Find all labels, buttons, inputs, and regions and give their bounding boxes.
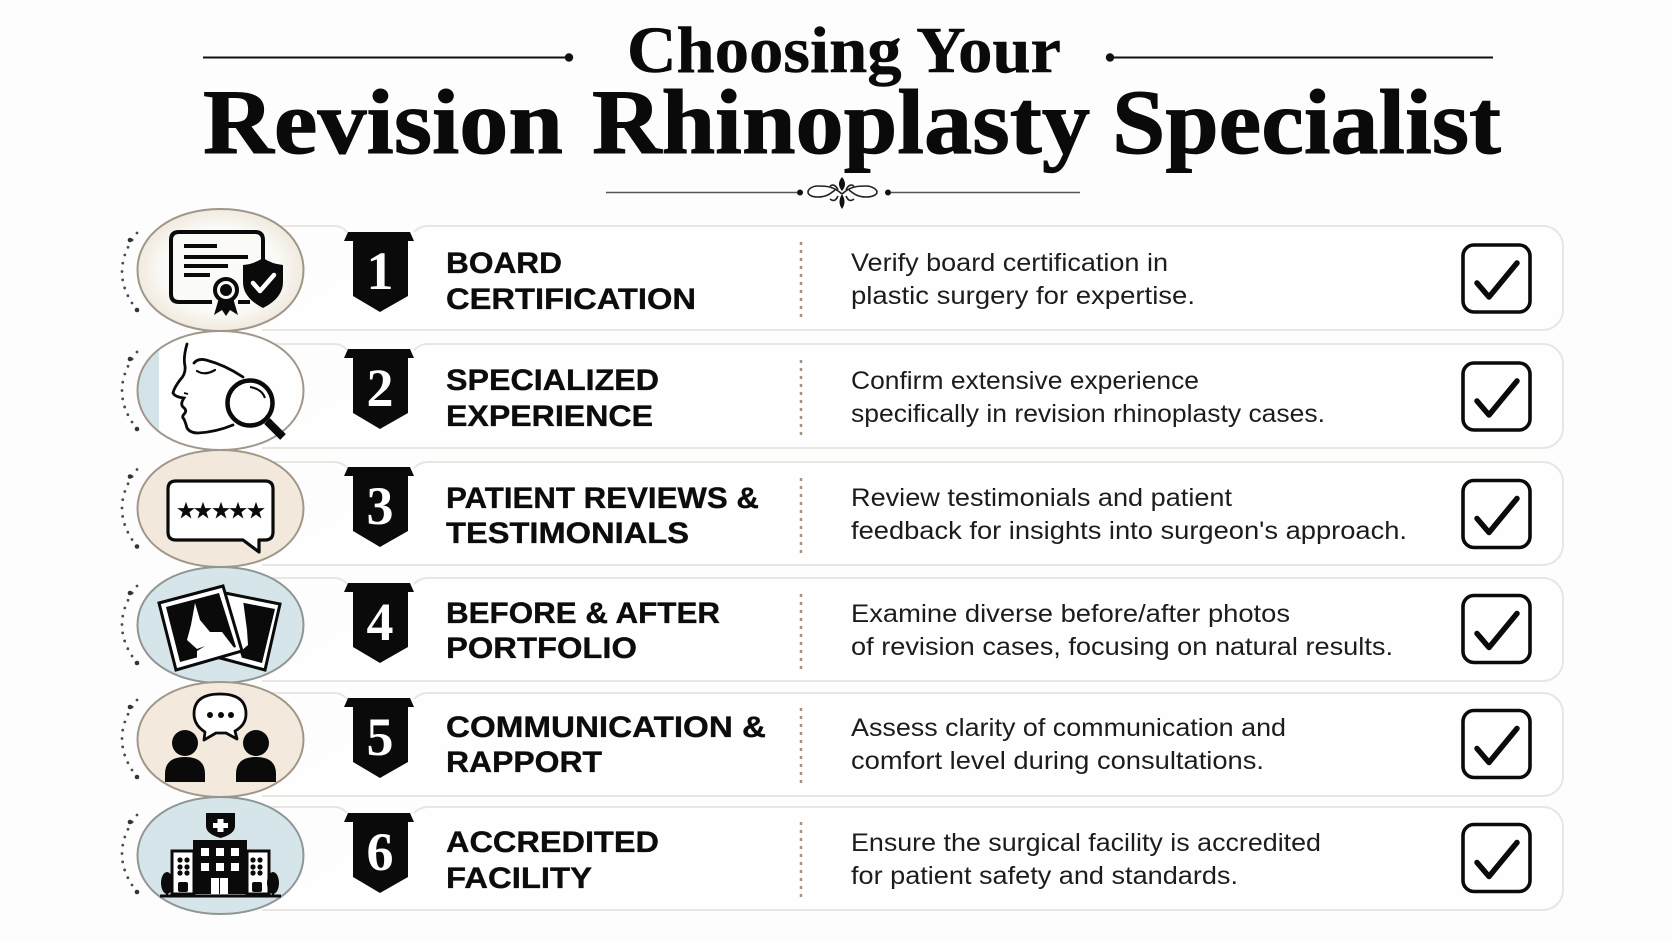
row 1 description xyxy=(851,249,1195,310)
ornamental flourish divider xyxy=(606,177,1080,209)
row 1 number badge xyxy=(344,232,414,312)
row 5 number badge xyxy=(344,698,414,778)
row 1 card xyxy=(262,226,1563,330)
row 5 checkbox xyxy=(1463,710,1530,778)
row 1 heading: CERTIFICATION xyxy=(446,283,696,316)
row 3 description: Review testimonials and patient xyxy=(851,484,1232,512)
row 2 dotted arc xyxy=(122,352,139,431)
row 3 description xyxy=(851,484,1407,545)
row 2 description: Confirm extensive experience xyxy=(851,367,1199,395)
row 3 description: feedback for insights into surgeon's approach. xyxy=(851,517,1407,545)
row 2 description xyxy=(851,367,1325,428)
row 1 checkbox xyxy=(1463,245,1530,312)
row 6 number badge: 6 xyxy=(366,822,394,882)
row 6 icon: hospital building xyxy=(138,797,304,914)
row 1 description: Verify board certification in xyxy=(851,249,1168,277)
row 6 heading: ACCREDITED xyxy=(446,826,659,859)
row 5 dotted arc xyxy=(122,700,139,779)
row 2 heading xyxy=(446,364,659,433)
row 6 description: for patient safety and standards. xyxy=(851,862,1238,890)
row 4 heading xyxy=(446,597,720,665)
title xyxy=(203,14,1501,173)
row 4 description xyxy=(851,600,1393,661)
row 2 description: specifically in revision rhinoplasty cases. xyxy=(851,400,1325,428)
row 3 heading: PATIENT REVIEWS & xyxy=(446,482,759,515)
row 3 heading: TESTIMONIALS xyxy=(446,517,689,550)
title line two: Revision Rhinoplasty Specialist: Revision xyxy=(203,71,563,173)
row 5 heading xyxy=(446,711,766,779)
row 3 heading xyxy=(446,482,759,550)
row 5 description xyxy=(851,714,1286,775)
title line one: Choosing Your: Choosing Your xyxy=(627,14,1061,87)
row 1 number badge: 1 xyxy=(366,241,394,301)
row 6 number badge xyxy=(344,813,414,893)
row 1 dotted arc xyxy=(122,233,139,312)
row 3 number badge: 3 xyxy=(366,476,394,536)
row 5 description: comfort level during consultations. xyxy=(851,747,1264,775)
row 6 dotted arc xyxy=(122,815,139,894)
title right rule with dot xyxy=(1106,53,1493,62)
row 4 description: of revision cases, focusing on natural results. xyxy=(851,633,1393,661)
row 6 checkbox xyxy=(1463,824,1530,892)
row 4 dotted arc xyxy=(122,586,139,665)
row 6 heading xyxy=(446,826,659,895)
row 2 icon: face profile with magnifier xyxy=(136,331,304,450)
row 2 number badge xyxy=(344,349,414,429)
row 6 card xyxy=(262,807,1563,910)
row 5 heading: COMMUNICATION & xyxy=(446,711,766,744)
row 2: specialized experience xyxy=(122,325,1563,455)
title left rule with dot xyxy=(203,53,573,62)
row 3 card xyxy=(262,462,1563,565)
row 1 description: plastic surgery for expertise. xyxy=(851,282,1195,310)
row 6 description: Ensure the surgical facility is accredited xyxy=(851,829,1321,857)
row 5 card xyxy=(262,693,1563,796)
row 5: communication and rapport xyxy=(122,682,1563,797)
row 4 heading: PORTFOLIO xyxy=(446,632,637,665)
row 3 icon: review speech bubble with stars xyxy=(138,450,304,567)
row 2 heading: EXPERIENCE xyxy=(446,400,653,433)
row 2 checkbox xyxy=(1463,363,1530,430)
row 3 checkbox xyxy=(1463,480,1530,548)
row 2 card xyxy=(262,344,1563,448)
row 4 number badge: 4 xyxy=(366,592,394,652)
row 5 number badge: 5 xyxy=(366,707,394,767)
row 6 heading: FACILITY xyxy=(446,862,592,895)
row 4 icon: before and after photos xyxy=(138,567,304,683)
row 4 card xyxy=(262,578,1563,681)
row 2 number badge: 2 xyxy=(366,358,394,418)
row 4 description: Examine diverse before/after photos xyxy=(851,600,1290,628)
row 1 heading: BOARD xyxy=(446,247,562,280)
row 5 icon: two people talking xyxy=(138,682,304,797)
row 4 checkbox xyxy=(1463,596,1530,662)
row 6: accredited facility xyxy=(122,797,1563,914)
row 3 dotted arc xyxy=(122,470,139,549)
row 4 number badge xyxy=(344,583,414,663)
row 1: board certification xyxy=(122,209,1563,331)
title line two: Revision Rhinoplasty Specialist: Specialist xyxy=(1112,71,1501,173)
title line two: Revision Rhinoplasty Specialist: Rhinoplasty xyxy=(592,71,1090,173)
row 4 heading: BEFORE & AFTER xyxy=(446,597,720,630)
row 3 number badge xyxy=(344,467,414,547)
row 5 heading: RAPPORT xyxy=(446,746,602,779)
row 5 description: Assess clarity of communication and xyxy=(851,714,1286,742)
row 1 icon: certificate with shield xyxy=(138,209,304,331)
row 3: patient reviews and testimonials xyxy=(122,450,1563,567)
row 6 description xyxy=(851,829,1321,890)
row 4: before and after portfolio xyxy=(122,567,1563,683)
row 1 heading xyxy=(446,247,696,316)
row 2 heading: SPECIALIZED xyxy=(446,364,659,397)
